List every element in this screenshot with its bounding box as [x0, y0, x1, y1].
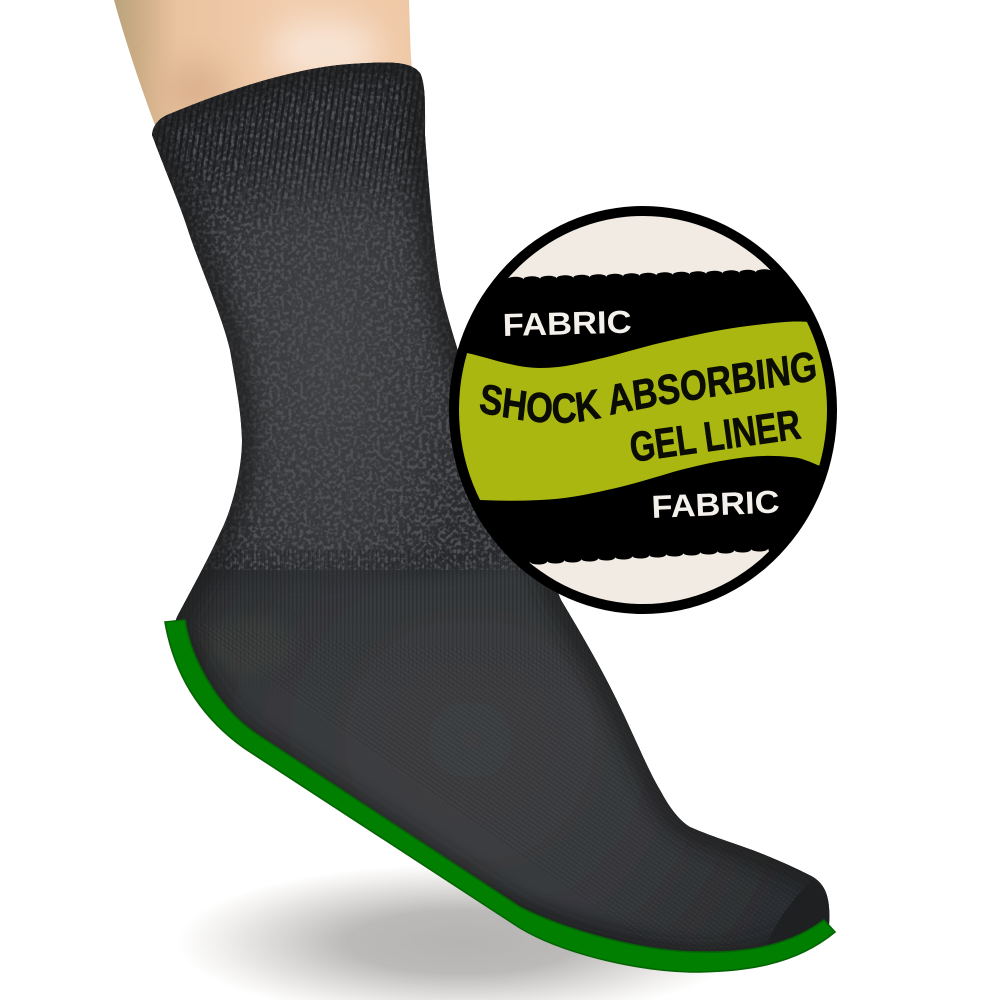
badge black disc [449, 206, 837, 614]
knit texture [150, 60, 860, 980]
label: lower fabric: FABRIC [651, 483, 780, 525]
gel liner band [459, 322, 827, 501]
label: shock absorbing: SHOCK ABSORBING [480, 352, 816, 424]
top cream layer [506, 216, 771, 280]
toe cap [767, 880, 829, 945]
bottom cream layer [530, 548, 769, 604]
ground shadow [177, 864, 747, 1000]
gel liner sole [165, 620, 835, 972]
infographic: sock with shock absorbing gel liner [114, 0, 837, 1000]
heel highlight [205, 615, 295, 675]
label: gel liner: GEL LINER [627, 400, 803, 471]
sock [150, 60, 860, 990]
sock upper body [152, 63, 829, 962]
magnified badge: gel liner cross-section [449, 206, 837, 614]
sock foot section [176, 565, 830, 934]
label: upper fabric: FABRIC [502, 304, 632, 343]
edge shading [152, 63, 829, 962]
leg skin [110, 0, 415, 130]
